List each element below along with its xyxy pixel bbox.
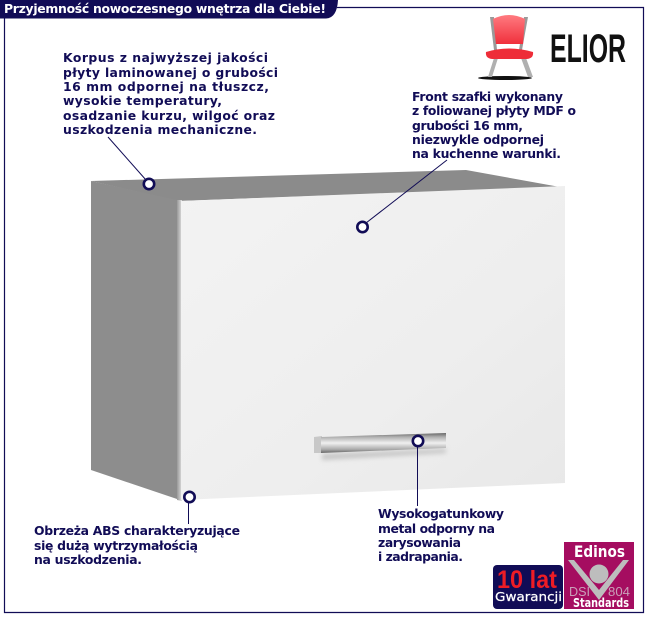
text: handle description xyxy=(378,506,504,564)
text: front description: grubości 16 mm, xyxy=(412,118,523,133)
text: handle description: zarysowania xyxy=(378,535,461,550)
text: body description xyxy=(63,50,278,137)
cabinet side xyxy=(91,181,177,499)
text: handle description: Wysokogatunkowy xyxy=(378,506,504,521)
text: handle description: i zadrapania. xyxy=(378,549,463,564)
text: edge description: Obrzeża ABS charakteryzujące xyxy=(34,523,240,538)
badge: 10 years warranty xyxy=(493,565,563,609)
badge: Edinos standards: 804 xyxy=(608,584,630,599)
badge: Edinos standards xyxy=(564,542,634,610)
text: front description: na kuchenne warunki. xyxy=(412,146,561,161)
callout: front panel xyxy=(357,89,576,232)
text: front description: niezwykle odpornej xyxy=(412,132,544,147)
callout: cabinet body xyxy=(63,50,278,189)
cabinet front panel xyxy=(181,186,565,500)
cabinet edge strip xyxy=(177,200,182,501)
logo: Elior chair and wordmark xyxy=(478,15,626,80)
text: handle description: metal odporny na xyxy=(378,521,495,536)
text: edge description: się dużą wytrzymałością xyxy=(34,538,198,553)
badge: 10 years warranty: 10 lat xyxy=(497,566,558,594)
marker: body xyxy=(144,179,154,189)
text: edge description xyxy=(34,523,240,567)
leader line: edge xyxy=(188,502,190,524)
text: body description: 16 mm odpornej na tłuszcz, xyxy=(63,79,269,94)
text: front description xyxy=(412,89,576,161)
text: body description: uszkodzenia mechaniczne. xyxy=(63,122,257,137)
text: edge description: na uszkodzenia. xyxy=(34,552,142,567)
text: body description: płyty laminowanej o grubości xyxy=(63,65,278,80)
cabinet top xyxy=(91,170,560,201)
marker: edge xyxy=(184,492,195,502)
badge: 10 years warranty: Gwarancji xyxy=(495,589,562,604)
marker: front xyxy=(357,222,368,232)
text: body description: Korpus z najwyższej jakości xyxy=(63,50,268,65)
text: front description: Front szafki wykonany xyxy=(412,89,563,104)
callout: handle xyxy=(378,436,504,564)
badge: Edinos standards: Standards xyxy=(573,596,629,610)
text: body description: osadzanie kurzu, wilgoć oraz xyxy=(63,108,275,123)
badge: Edinos standards: Edinos xyxy=(574,542,625,561)
badge: Edinos standards: DSI xyxy=(569,584,590,599)
cabinet illustration xyxy=(91,170,565,501)
callout: ABS edge xyxy=(34,492,240,567)
text: front description: z foliowanej płyty MDF o xyxy=(412,103,576,118)
leader line: front xyxy=(366,160,447,223)
handle xyxy=(314,433,446,460)
icon: red chair xyxy=(478,15,533,80)
text: body description: wysokie temperatury, xyxy=(63,93,222,108)
title banner: Przyjemność nowoczesnego wnętrza dla Ciebie! xyxy=(4,1,326,16)
leader line: handle xyxy=(416,446,418,506)
marker: handle xyxy=(413,436,423,446)
leader line: body xyxy=(108,137,146,180)
